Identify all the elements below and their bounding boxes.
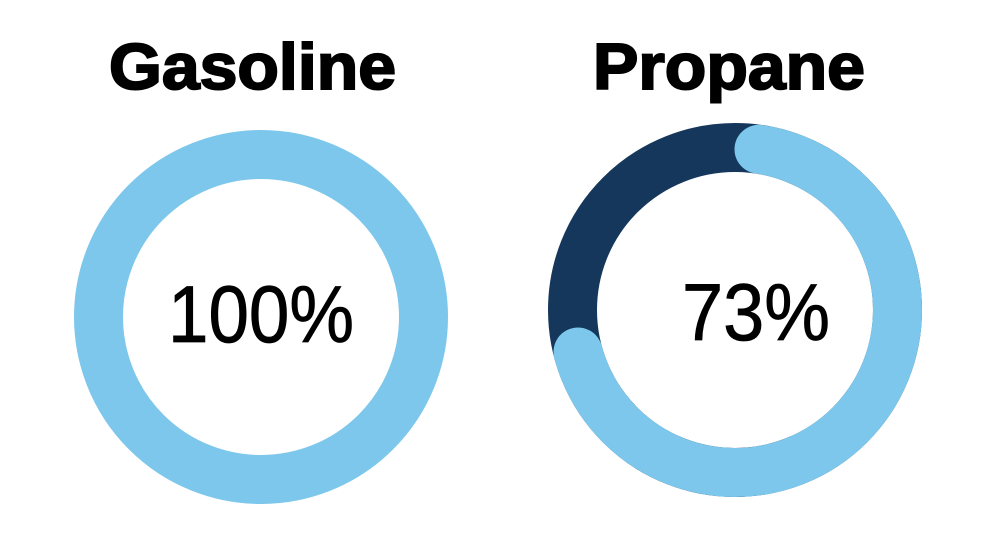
panel: gasoline [98, 30, 424, 480]
heading: Propane: Propane [593, 30, 865, 103]
panel: propane [572, 30, 898, 473]
heading: Gasoline: Gasoline [109, 30, 396, 103]
donut value arc [578, 149, 897, 473]
value: 100%: 100% [168, 270, 354, 360]
donut chart: gasoline 100% [98, 154, 424, 480]
value: 73%: 73% [682, 268, 830, 358]
donut track [572, 148, 898, 472]
donut chart: propane 73% [572, 148, 898, 473]
